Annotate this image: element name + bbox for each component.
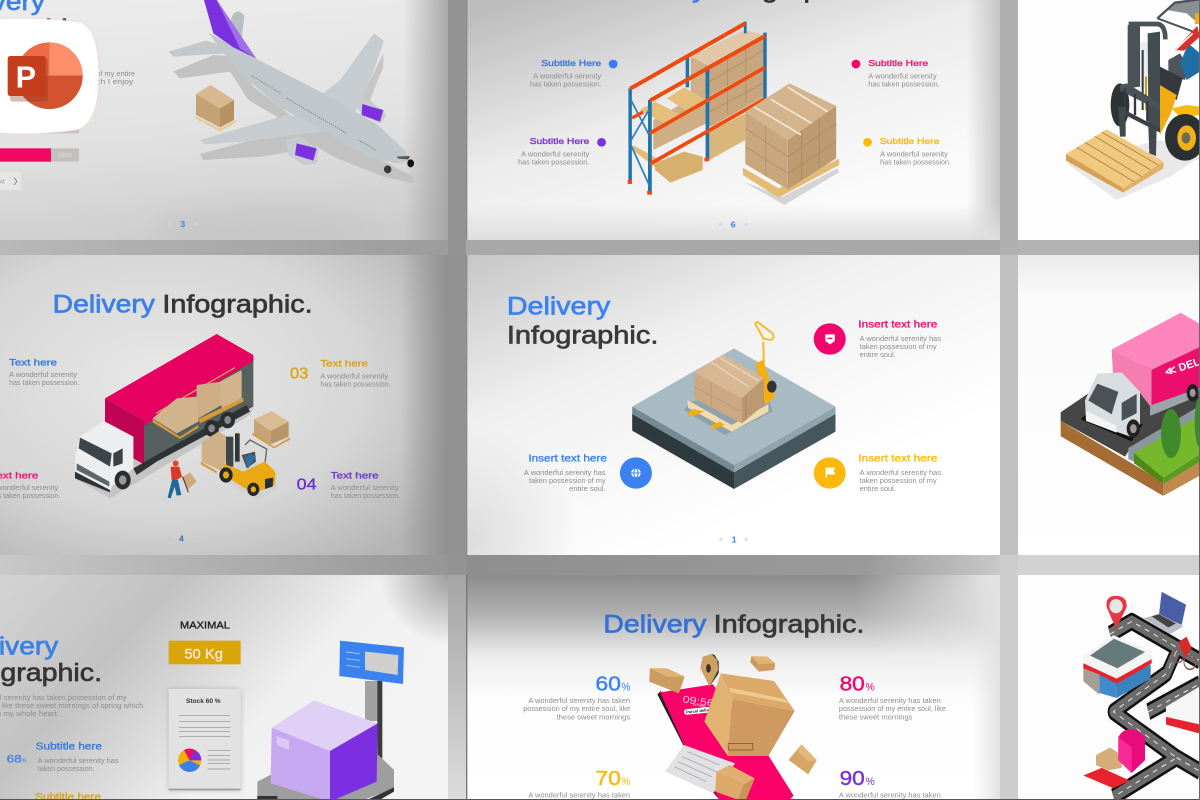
pallet rack illustration (628, 22, 765, 195)
stat: 80 percent: % (865, 682, 875, 694)
progress bar (0, 127, 79, 162)
stat: 68 percent: taken possession. (38, 766, 95, 773)
mailbox and parcels (1083, 729, 1145, 788)
slide 2 title: Infographic. (714, 611, 864, 639)
page number 6 (719, 222, 748, 228)
phone with parcels illustration: Monday (692, 703, 706, 708)
callout: pink insert text: taken possession of my (860, 344, 937, 351)
callout: 04: A wonderful serenity (331, 485, 399, 492)
forklift and pallet (1066, 0, 1200, 200)
panel: route map slide (1018, 575, 1200, 800)
stat: 70 percent: A wonderful serenity has taken (528, 793, 630, 800)
weighing scale with box (257, 641, 404, 800)
panel: slide 1 main center (466, 255, 1000, 555)
stat: 70 percent: 70 (595, 768, 621, 790)
shop kiosk (1166, 686, 1200, 734)
stat: 90 percent: % (865, 776, 875, 788)
callout: blue subtitle (530, 58, 618, 89)
slide 2 title (603, 611, 864, 639)
stat: 70 percent (528, 768, 631, 800)
callout: blue text: A wonderful serenity (9, 372, 78, 379)
stat: 80 percent (839, 674, 946, 721)
page number 4: 4 (179, 534, 184, 544)
callout: 03: 03 (290, 365, 308, 382)
panel: slide 6 warehouse shelves (466, 0, 1000, 240)
page number 4 (167, 536, 197, 542)
stat: 60 percent: possession of my entire soul, like (523, 706, 630, 713)
callout: 04: 04 (297, 477, 317, 494)
page number 1: 1 (732, 534, 737, 544)
callout: yellow subtitle: has taken possession. (880, 160, 951, 167)
stat: 68 percent (7, 742, 119, 773)
progress bar: 86% (58, 152, 73, 159)
callout: blue text: Text here (9, 357, 57, 367)
callout: pink insert text (814, 319, 942, 359)
airplane illustration (168, 0, 414, 184)
intro paragraph (0, 695, 143, 718)
stat: 80 percent: A wonderful serenity has taken (839, 698, 941, 705)
laptop (1143, 592, 1186, 634)
callout: yellow insert text: Insert text here (858, 453, 938, 464)
stat: 70 percent: % (621, 776, 631, 788)
callout: yellow subtitle (863, 136, 951, 167)
stock document: Stock 60 % (186, 699, 221, 705)
stat: 60 percent (523, 674, 631, 721)
stat: 68 percent: % (22, 759, 27, 765)
callout: blue subtitle: Subtitle Here (541, 58, 602, 68)
callout: pink text (0, 470, 60, 500)
50 kg badge: 50 Kg (184, 645, 223, 661)
callout: 03: Text here (320, 359, 368, 369)
icon: PowerPoint logo: P (16, 60, 36, 94)
callout: purple subtitle: Subtitle Here (530, 136, 590, 146)
stat: 60 percent: A wonderful serenity has taken (528, 698, 630, 705)
stat: 68 percent: A wonderful serenity has (38, 758, 119, 765)
panel: slide 3 airplane (0, 0, 450, 257)
callout: blue text (9, 357, 80, 387)
pie chart (178, 749, 201, 772)
callout: pink subtitle: Subtitle Here (868, 58, 929, 68)
callout: yellow insert text: A wonderful serenity has (860, 470, 942, 477)
stat: 68 percent: Subtitle here (36, 742, 102, 753)
callout: yellow subtitle: A wonderful serenity (880, 152, 948, 159)
slide 3 body text (98, 70, 135, 86)
maximal label: MAXIMAL (180, 620, 231, 631)
panel: slide weight scale (0, 505, 520, 800)
stat: 60 percent: 60 (595, 674, 621, 696)
callout: 04 (297, 470, 400, 500)
phone with parcels illustration: 09:56 (682, 694, 715, 710)
stat: 68 percent: 68 (7, 754, 22, 766)
map pin (1106, 596, 1127, 629)
title (507, 293, 658, 349)
stat: 80 percent: 80 (840, 674, 865, 696)
road network (1110, 621, 1200, 797)
stat: 60 percent: % (621, 682, 631, 694)
worker with hand truck (168, 460, 197, 498)
icon: PowerPoint logo (0, 19, 98, 134)
callout: pink insert text: entire soul. (860, 352, 896, 359)
callout: purple subtitle (518, 136, 606, 167)
cyclist (1173, 637, 1196, 669)
stat: 90 percent: 90 (840, 768, 865, 790)
slide 6 title (692, 0, 808, 3)
isometric platform (632, 348, 836, 489)
callout: blue subtitle: has taken possession. (530, 82, 601, 89)
stat: 80 percent: possession of my entire soul, like (839, 706, 946, 713)
stat: 90 percent: A wonderful serenity has taken (839, 793, 941, 800)
page number 3 (168, 221, 198, 227)
callout: yellow insert text (814, 453, 942, 493)
stock document (169, 689, 241, 790)
callout: blue insert text: entire soul. (569, 486, 606, 493)
callout: yellow insert text: entire soul. (860, 486, 896, 493)
slide 4 title: Delivery (53, 292, 156, 319)
callout: pink insert text: Insert text here (858, 319, 938, 330)
phone with parcels illustration: Parcel delivery (686, 707, 716, 714)
slide 4 title (54, 294, 310, 318)
panel: slide 2 phone delivery (466, 432, 1146, 800)
van on road tile (1061, 313, 1200, 496)
callout: pink subtitle: has taken possession. (868, 82, 940, 89)
callout: blue insert text (524, 453, 652, 493)
title: Delivery (507, 293, 611, 320)
truck illustration (75, 334, 253, 498)
pallet jack and boxes (687, 322, 777, 432)
title: Infographic. (507, 322, 658, 349)
page number 6: 6 (731, 219, 736, 229)
callout: blue insert text: Insert text here (528, 453, 607, 464)
callout: 03 (290, 359, 391, 389)
icon: flag (814, 457, 846, 489)
pallet of boxes (195, 85, 236, 132)
panel: pink delivery van slide (1018, 255, 1200, 555)
panel: forklift slide (1018, 0, 1200, 240)
stat: 80 percent: these sweet mornings (839, 714, 913, 721)
stacked boxes on pallet (743, 83, 839, 205)
panel: delivery truck slide (0, 255, 450, 555)
page number 3: 3 (180, 219, 185, 229)
callout: blue subtitle: A wonderful serenity (533, 74, 602, 81)
callout: blue text: has taken possession. (9, 380, 80, 387)
icon: pink badge (814, 323, 846, 355)
icon: globe (620, 457, 652, 489)
store building (1083, 635, 1152, 698)
phone with parcels illustration (649, 654, 817, 800)
callout: pink insert text: A wonderful serenity has (860, 336, 942, 343)
slide 4 title: Infographic. (162, 292, 313, 319)
callout: pink subtitle (852, 58, 940, 89)
slide heading (0, 633, 102, 687)
callout: yellow subtitle: Subtitle Here (880, 136, 940, 146)
callout: purple subtitle: A wonderful serenity (521, 152, 590, 159)
callout: pink subtitle: A wonderful serenity (868, 74, 937, 81)
50 kg badge (169, 641, 241, 664)
callout: yellow insert text: taken possession of my (860, 478, 937, 485)
slide 2 title: Delivery (603, 611, 707, 639)
slide 3 heading (0, 0, 66, 21)
callout: purple subtitle: has taken possession. (518, 160, 589, 167)
stat: 90 percent (839, 768, 941, 800)
stat: 60 percent: these sweet mornings (557, 714, 631, 721)
callout: 03: has taken possession. (320, 382, 391, 389)
yellow forklift (219, 433, 278, 500)
loose pallet boxes (201, 411, 290, 473)
next button (0, 172, 21, 190)
callout: 04: Text here (331, 470, 379, 480)
callout: blue insert text: taken possession of my (529, 478, 606, 485)
callout: blue insert text: A wonderful serenity has (524, 470, 606, 477)
callout: 04: has taken possession. (331, 493, 400, 500)
page number 1 (719, 534, 748, 544)
callout: 03: A wonderful serenity (320, 374, 389, 381)
